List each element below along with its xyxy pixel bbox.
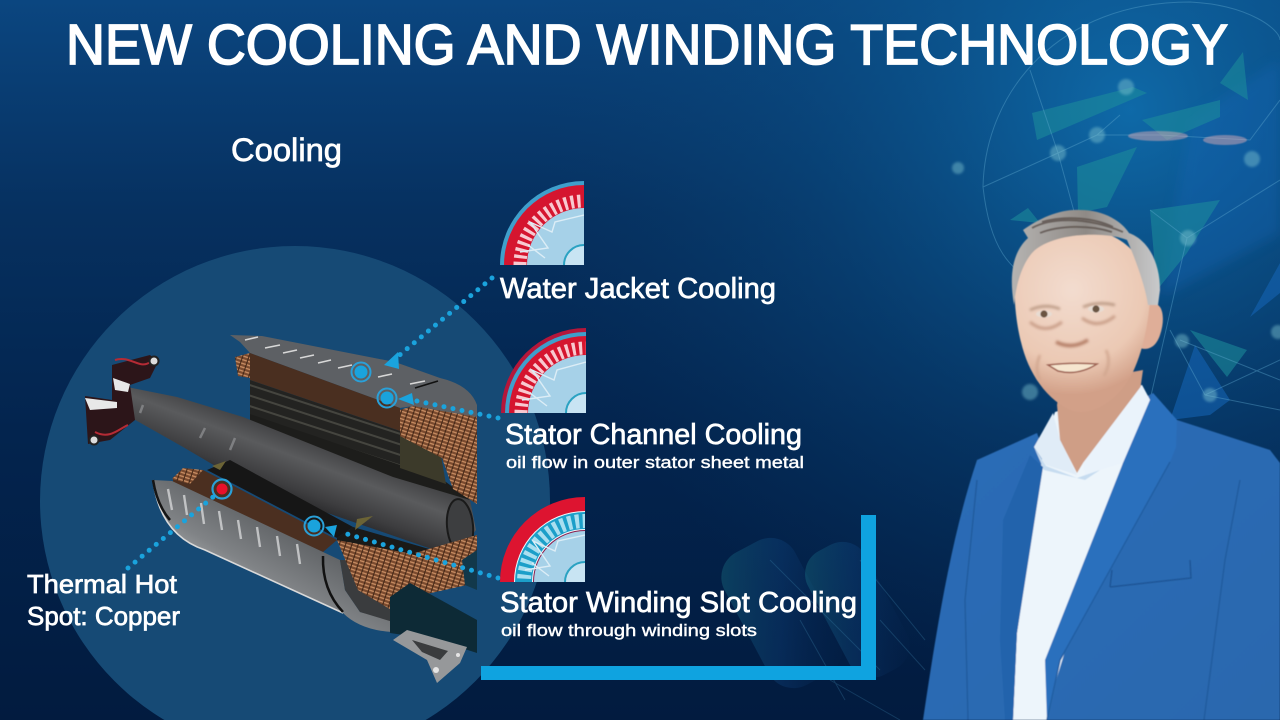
olive inner part: [400, 431, 446, 484]
callout marker: stator winding slot: [304, 516, 337, 537]
label: thermal hot spot: Spot: Copper: [27, 601, 180, 631]
jacket lapels: [1045, 393, 1177, 720]
shirt: [1013, 385, 1150, 720]
label: stator winding slot cooling: Stator Winding Slot Cooling: [500, 587, 857, 619]
dark teal bracket: [390, 583, 477, 653]
label: stator winding slot cooling: oil flow through winding slots: [501, 621, 757, 640]
label: thermal hot spot: Thermal Hot: [27, 569, 178, 599]
label: thermal hot spot: [27, 569, 180, 631]
lower arch interior: [340, 560, 395, 622]
callout marker: thermal hot spot: [212, 480, 232, 498]
icon: stator channel cooling: [501, 328, 586, 413]
hair: [1012, 210, 1160, 305]
face: [1015, 230, 1150, 412]
label: stator winding slot cooling: [500, 587, 857, 640]
housing louvers: [245, 337, 425, 384]
label: stator channel cooling: [505, 419, 804, 472]
lower network decoration: [711, 528, 925, 720]
label: stator channel cooling: Stator Channel Cooling: [505, 419, 802, 451]
left connector: [85, 355, 158, 444]
blue L-shaped frame: [481, 515, 876, 680]
rotor shaft: [127, 387, 476, 553]
callout marker: stator channel: [378, 388, 414, 408]
network sphere decoration: [952, 2, 1280, 420]
dark base behind upper stator: [250, 410, 470, 505]
lower silver shell: [153, 480, 393, 632]
dark base under shaft: [337, 527, 477, 576]
icon: stator winding slot cooling: [500, 497, 585, 582]
title: NEW COOLING AND WINDING TECHNOLOGY: [66, 13, 1228, 77]
eyes: [1036, 305, 1104, 318]
silver mounting bracket: [393, 630, 467, 683]
lower brown lamination: [173, 470, 337, 552]
ear: [1140, 304, 1163, 349]
motor cutaway illustration: [85, 335, 477, 683]
lower copper winding: [337, 540, 477, 611]
label: water jacket cooling: Water Jacket Cooling: [500, 273, 776, 305]
collar right: [1083, 385, 1150, 476]
icon: water jacket cooling: [500, 181, 584, 265]
callout marker: water jacket: [352, 352, 399, 382]
hair streaks: [1032, 218, 1123, 233]
facial features: [1030, 303, 1115, 380]
lower black channel: [207, 460, 353, 538]
label: stator channel cooling: oil flow in outer stator sheet metal: [506, 453, 804, 472]
heading: cooling: Cooling: [231, 132, 342, 168]
presenter portrait: [923, 210, 1280, 720]
callout lines: [128, 278, 498, 578]
collar left: [1034, 413, 1077, 475]
upper brown lamination: [250, 353, 400, 431]
neck: [1057, 370, 1143, 473]
mouth: [1048, 363, 1097, 372]
upper stator housing: [230, 335, 477, 418]
lower copper end small: [172, 468, 203, 484]
upper copper end: [235, 353, 250, 378]
backdrop circle: [40, 246, 550, 720]
jacket: [923, 393, 1280, 720]
upper copper winding block: [400, 406, 477, 504]
upper grooves: [250, 380, 400, 465]
